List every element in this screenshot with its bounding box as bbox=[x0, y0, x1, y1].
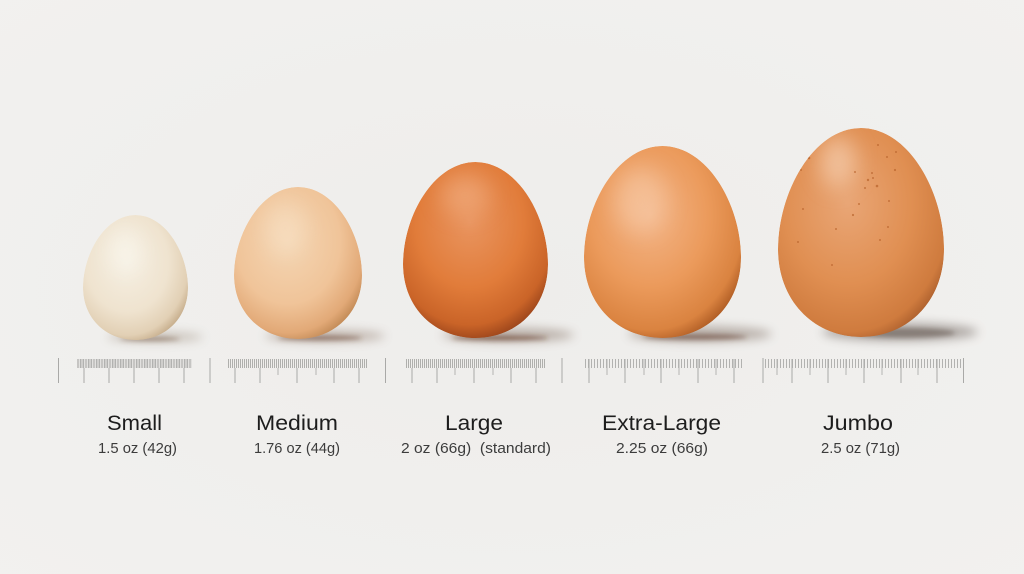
label: extra-large bbox=[602, 412, 721, 457]
ruler: small bbox=[58, 358, 192, 383]
ruler: medium bbox=[210, 358, 367, 383]
label: jumbo: Jumbo bbox=[823, 412, 893, 435]
ruler: large bbox=[386, 358, 545, 383]
egg: large bbox=[403, 162, 574, 342]
ruler: extra-large bbox=[562, 358, 742, 383]
label: large: Large bbox=[445, 412, 503, 435]
label: jumbo bbox=[821, 412, 900, 457]
label: small: Small bbox=[107, 412, 162, 435]
label: medium bbox=[254, 412, 340, 457]
label: extra-large: 2.25 oz (66g) bbox=[616, 441, 708, 457]
label: medium: 1.76 oz (44g) bbox=[254, 441, 340, 457]
egg: small bbox=[83, 215, 203, 342]
label: medium: Medium bbox=[256, 412, 338, 435]
label: small: 1.5 oz (42g) bbox=[98, 441, 177, 457]
label: jumbo: 2.5 oz (71g) bbox=[821, 441, 900, 457]
egg: extra-large bbox=[584, 146, 772, 342]
label: large bbox=[401, 412, 551, 457]
egg: jumbo bbox=[778, 128, 978, 341]
egg: medium bbox=[234, 187, 385, 342]
label: small bbox=[98, 412, 177, 457]
label: large: 2 oz (66g) (standard) bbox=[401, 441, 551, 457]
ruler: jumbo bbox=[763, 358, 964, 383]
speckles bbox=[797, 144, 897, 266]
label: extra-large: Extra-Large bbox=[602, 412, 721, 435]
